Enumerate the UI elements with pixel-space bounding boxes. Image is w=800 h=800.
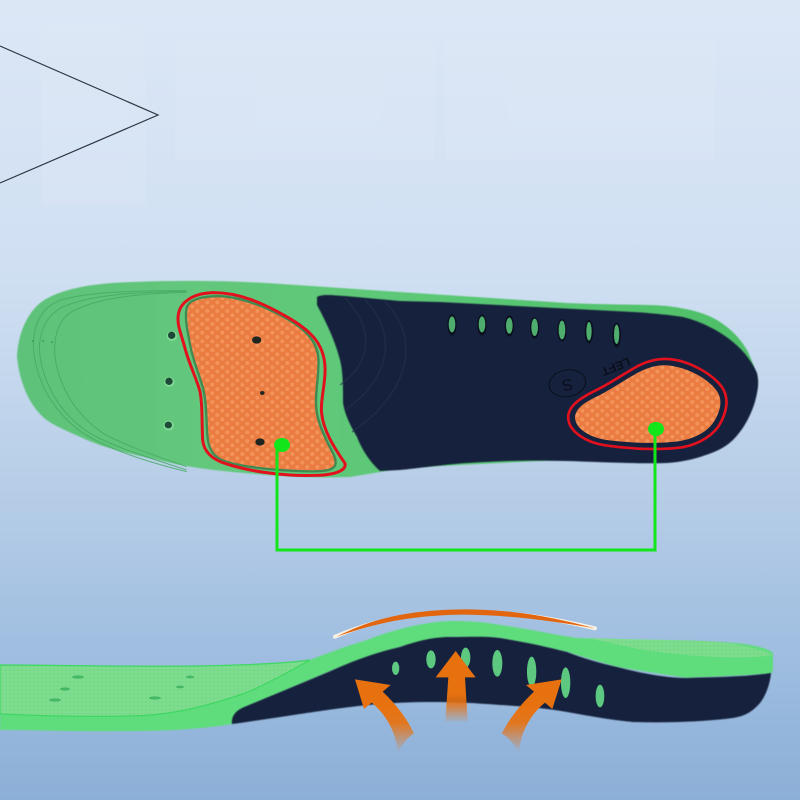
arrow right [502,679,562,753]
arrow left [355,679,414,753]
embossed size and side mark: S [560,374,574,393]
ventilation slots top view [447,314,621,347]
embossed size and side mark [547,355,632,400]
navy arch contours [340,298,406,432]
side slots [392,648,604,707]
green insole body [17,281,758,477]
front orange pad [187,297,334,470]
heel orange pad [575,365,720,443]
forefoot top surface [0,660,310,716]
pointer lines top left [0,46,158,183]
forefoot perforations [49,675,194,702]
arch support curve [335,609,595,637]
embossed size and side mark: LEFT [599,355,632,379]
insole side view [0,609,773,753]
insole top view [17,281,758,550]
callout dots [274,422,664,452]
toe ridges [33,291,187,472]
navy arch and heel [317,295,758,471]
heel top surface [587,638,773,657]
faint panels at top [42,25,715,205]
red outline front pad [178,293,345,476]
red outline heel pad [568,359,726,449]
forefoot holes [163,331,177,431]
side green body [0,621,773,731]
arrow center [436,651,476,722]
toe marks [32,340,53,343]
side navy shell [232,637,771,724]
pad holes [252,336,265,446]
green connector bracket [274,422,664,550]
